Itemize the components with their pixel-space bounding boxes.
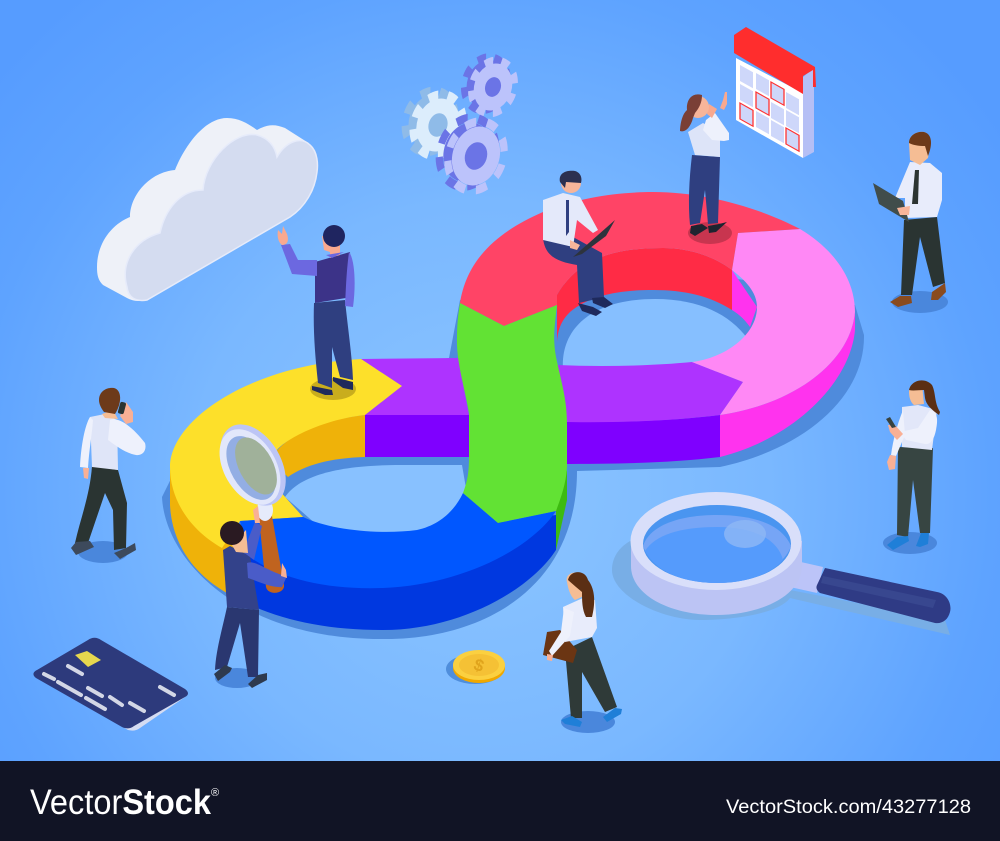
right hole	[563, 299, 747, 372]
blue side	[227, 515, 556, 630]
large magnifying glass	[612, 492, 950, 635]
person: man pointing at cloud	[278, 225, 356, 400]
gears icon	[397, 51, 522, 198]
pink side	[720, 312, 855, 457]
coin symbol: $	[471, 655, 487, 676]
image id: VectorStock.com/43277128	[726, 797, 971, 818]
coin	[446, 650, 505, 684]
card edge	[33, 675, 188, 731]
person: man sitting with laptop	[543, 171, 615, 316]
purple left top	[361, 358, 469, 415]
person: woman with phone	[883, 380, 940, 554]
yellow top	[170, 359, 402, 548]
red inner wall	[557, 248, 732, 342]
green side	[556, 470, 567, 550]
calendar icon	[734, 27, 816, 158]
card stripes	[44, 666, 174, 711]
glass shadow	[612, 540, 950, 635]
handle	[816, 568, 950, 623]
lens	[643, 505, 791, 583]
purple left side	[365, 414, 470, 457]
card chip	[75, 651, 101, 667]
pink top	[692, 229, 855, 415]
purple right side	[560, 415, 720, 464]
ring	[631, 541, 802, 615]
cloud icon	[97, 118, 317, 301]
green top	[457, 303, 567, 523]
logo: VectorStock	[30, 783, 211, 822]
calendar side	[803, 68, 814, 158]
cloud front	[125, 134, 317, 300]
person: man with tablet	[873, 132, 948, 313]
footer bar	[0, 761, 1000, 841]
red top	[460, 192, 800, 326]
yellow side	[170, 470, 250, 593]
loop ground shadow	[162, 270, 864, 639]
credit card	[33, 638, 188, 731]
small magnifying glass	[207, 413, 299, 593]
yellow inner wall	[270, 415, 365, 477]
card body	[33, 638, 188, 728]
handle connector	[790, 560, 823, 593]
lens	[216, 428, 286, 508]
blue top	[240, 493, 556, 588]
handle	[259, 516, 284, 593]
registered mark: ®	[211, 787, 219, 799]
calendar cells	[740, 65, 799, 143]
person: woman with folder	[543, 572, 622, 733]
cloud back	[97, 118, 317, 301]
pink inner wall	[732, 270, 757, 327]
person: man on phone	[71, 388, 146, 563]
person: woman on red segment	[680, 92, 732, 244]
highlighted dates	[740, 82, 799, 151]
gear white	[397, 84, 471, 162]
calendar header	[734, 27, 816, 94]
gear lavender top	[457, 51, 522, 119]
rim	[207, 413, 299, 517]
left hole	[285, 465, 468, 545]
purple right top	[557, 362, 743, 422]
gear lavender bottom	[430, 110, 513, 198]
calendar page	[736, 58, 803, 158]
person: man holding magnifier	[214, 506, 287, 688]
infinity loop chart	[162, 192, 864, 639]
